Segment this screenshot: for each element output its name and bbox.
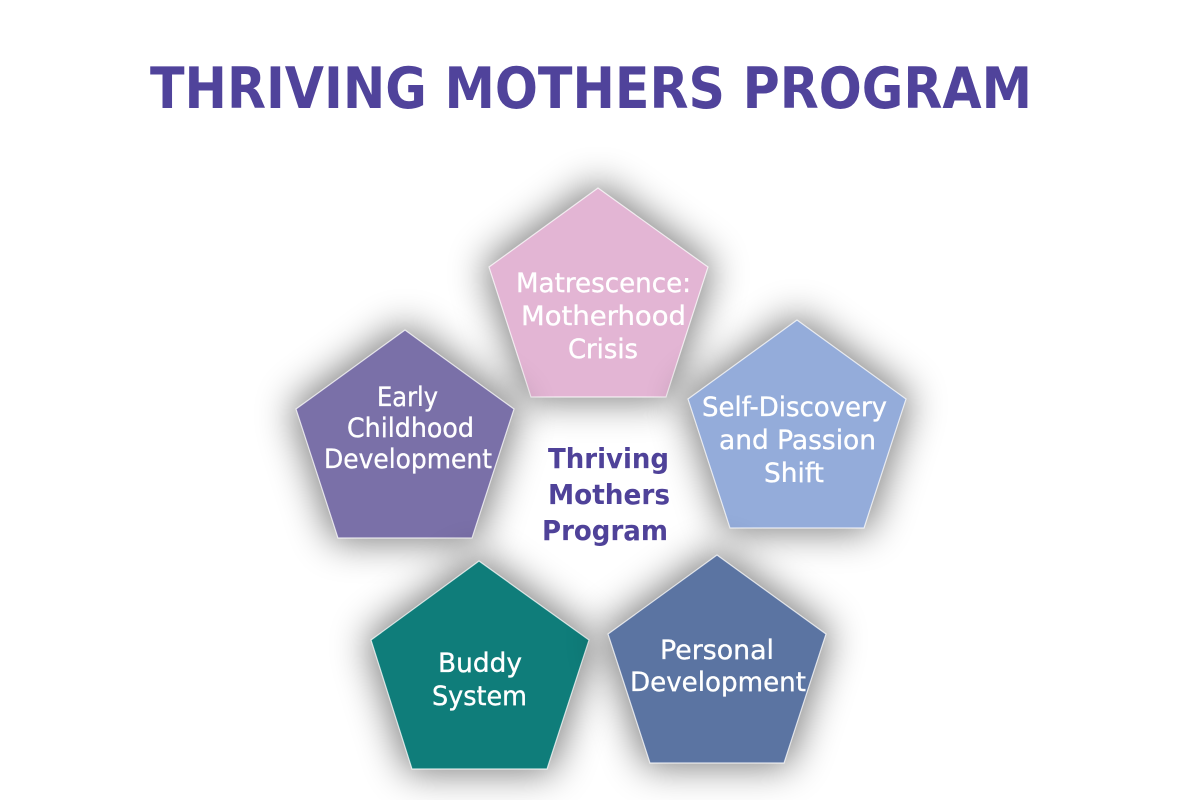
label: personal development	[630, 635, 806, 698]
label: early childhood development: Early	[377, 382, 438, 413]
label: self-discovery and passion shift: Shift	[764, 458, 824, 489]
label: personal development: Personal	[660, 635, 774, 666]
panel: self-discovery pentagon	[688, 320, 906, 528]
label: self-discovery and passion shift: Self-Discovery	[702, 392, 887, 423]
label: buddy system	[432, 648, 527, 712]
panel: personal development pentagon	[608, 555, 826, 763]
label: early childhood development: Childhood	[347, 413, 474, 444]
label: self-discovery and passion shift: and Passion	[719, 425, 876, 456]
center label	[542, 442, 670, 547]
panel: matrescence pentagon	[489, 188, 708, 397]
label: matrescence: Crisis	[568, 334, 638, 365]
label: buddy system: System	[432, 681, 527, 712]
label: matrescence: Matrescence:	[516, 268, 691, 299]
label: self-discovery and passion shift	[702, 392, 887, 489]
label: personal development: Development	[630, 667, 806, 698]
center label: Mothers	[548, 478, 670, 511]
title: THRIVING MOTHERS PROGRAM	[150, 56, 1032, 122]
label: early childhood development: Development	[324, 444, 492, 475]
label: matrescence: Motherhood	[521, 301, 686, 332]
center label: Thriving	[548, 442, 669, 475]
center label: Program	[542, 514, 668, 547]
panel: early childhood development pentagon	[296, 330, 514, 538]
label: matrescence	[516, 268, 691, 365]
label: buddy system: Buddy	[438, 648, 522, 679]
label: early childhood development	[324, 382, 492, 475]
panel: buddy system pentagon	[371, 561, 589, 769]
